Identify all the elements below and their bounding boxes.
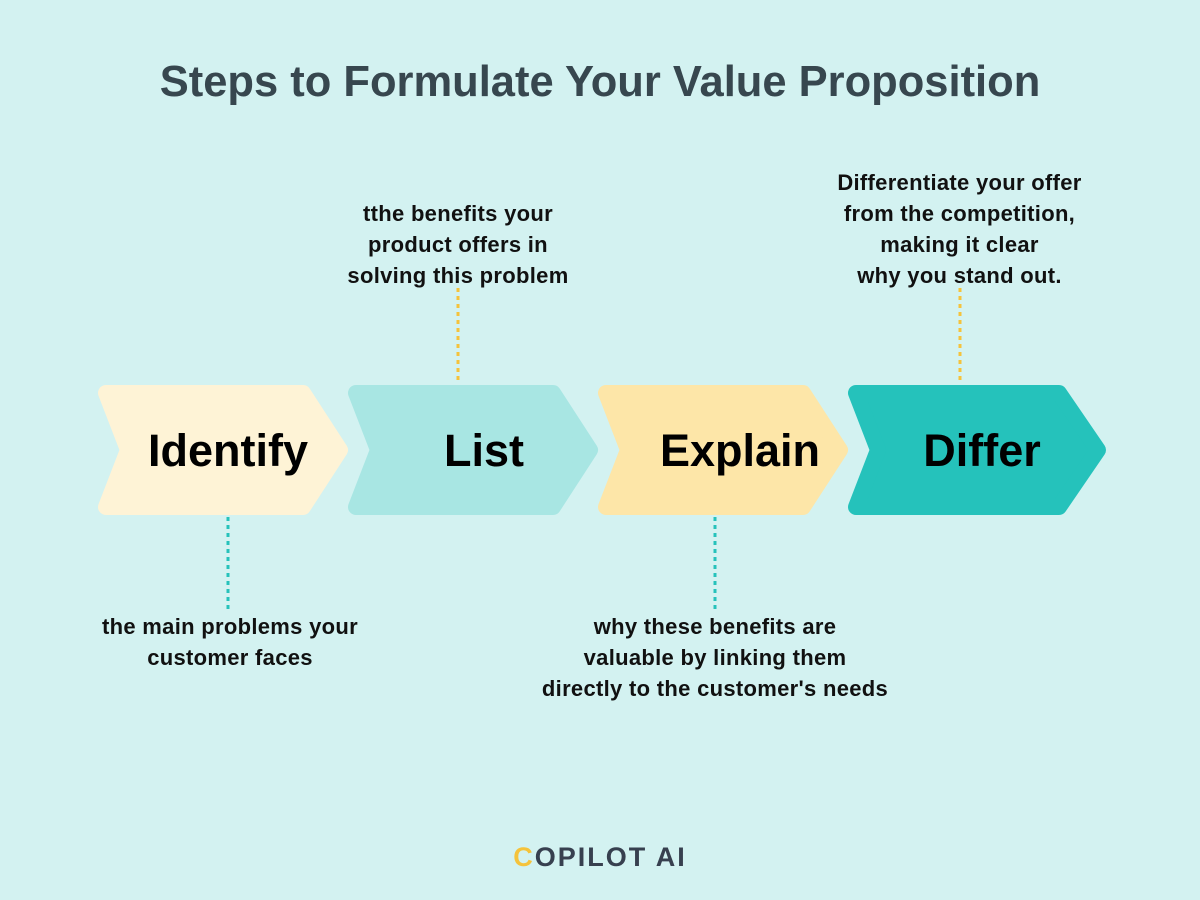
- text: Explain description: directly to the customer's needs: [542, 676, 888, 701]
- text: Identify description: [102, 614, 358, 670]
- text: Differ description: Differentiate your offer: [837, 170, 1082, 195]
- chevron: List: [356, 393, 590, 507]
- chevron: Explain: [606, 393, 840, 507]
- connector: Differ: [958, 288, 962, 383]
- title: Steps to Formulate Your Value Proposition: [160, 58, 1040, 106]
- chevron: Differ: [856, 393, 1098, 507]
- text: List description: product offers in: [368, 232, 548, 257]
- text: List description: solving this problem: [347, 263, 569, 288]
- text: Identify description: customer faces: [147, 645, 313, 670]
- text: List description: tthe benefits your: [363, 201, 553, 226]
- text: Differ description: making it clear: [880, 232, 1039, 257]
- text: Differ description: [837, 170, 1082, 288]
- text: Differ description: from the competition,: [844, 201, 1075, 226]
- text: Differ description: why you stand out.: [857, 263, 1062, 288]
- chevron: Differ: Differ: [923, 425, 1041, 476]
- chevron: List: List: [444, 425, 524, 476]
- chevron: Explain: Explain: [660, 425, 820, 476]
- text: Identify description: the main problems your: [102, 614, 358, 639]
- text: Explain description: why these benefits are: [594, 614, 836, 639]
- chevron: Identify: [106, 393, 340, 507]
- logo: COPILOT AI: [513, 842, 687, 872]
- text: Explain description: valuable by linking them: [584, 645, 846, 670]
- connector: List: [456, 288, 460, 383]
- connector: Identify: [226, 517, 230, 610]
- connector: Explain: [714, 517, 716, 610]
- chevron: Identify: Identify: [148, 425, 308, 476]
- text: Explain description: [542, 614, 888, 701]
- text: List description: [347, 201, 569, 288]
